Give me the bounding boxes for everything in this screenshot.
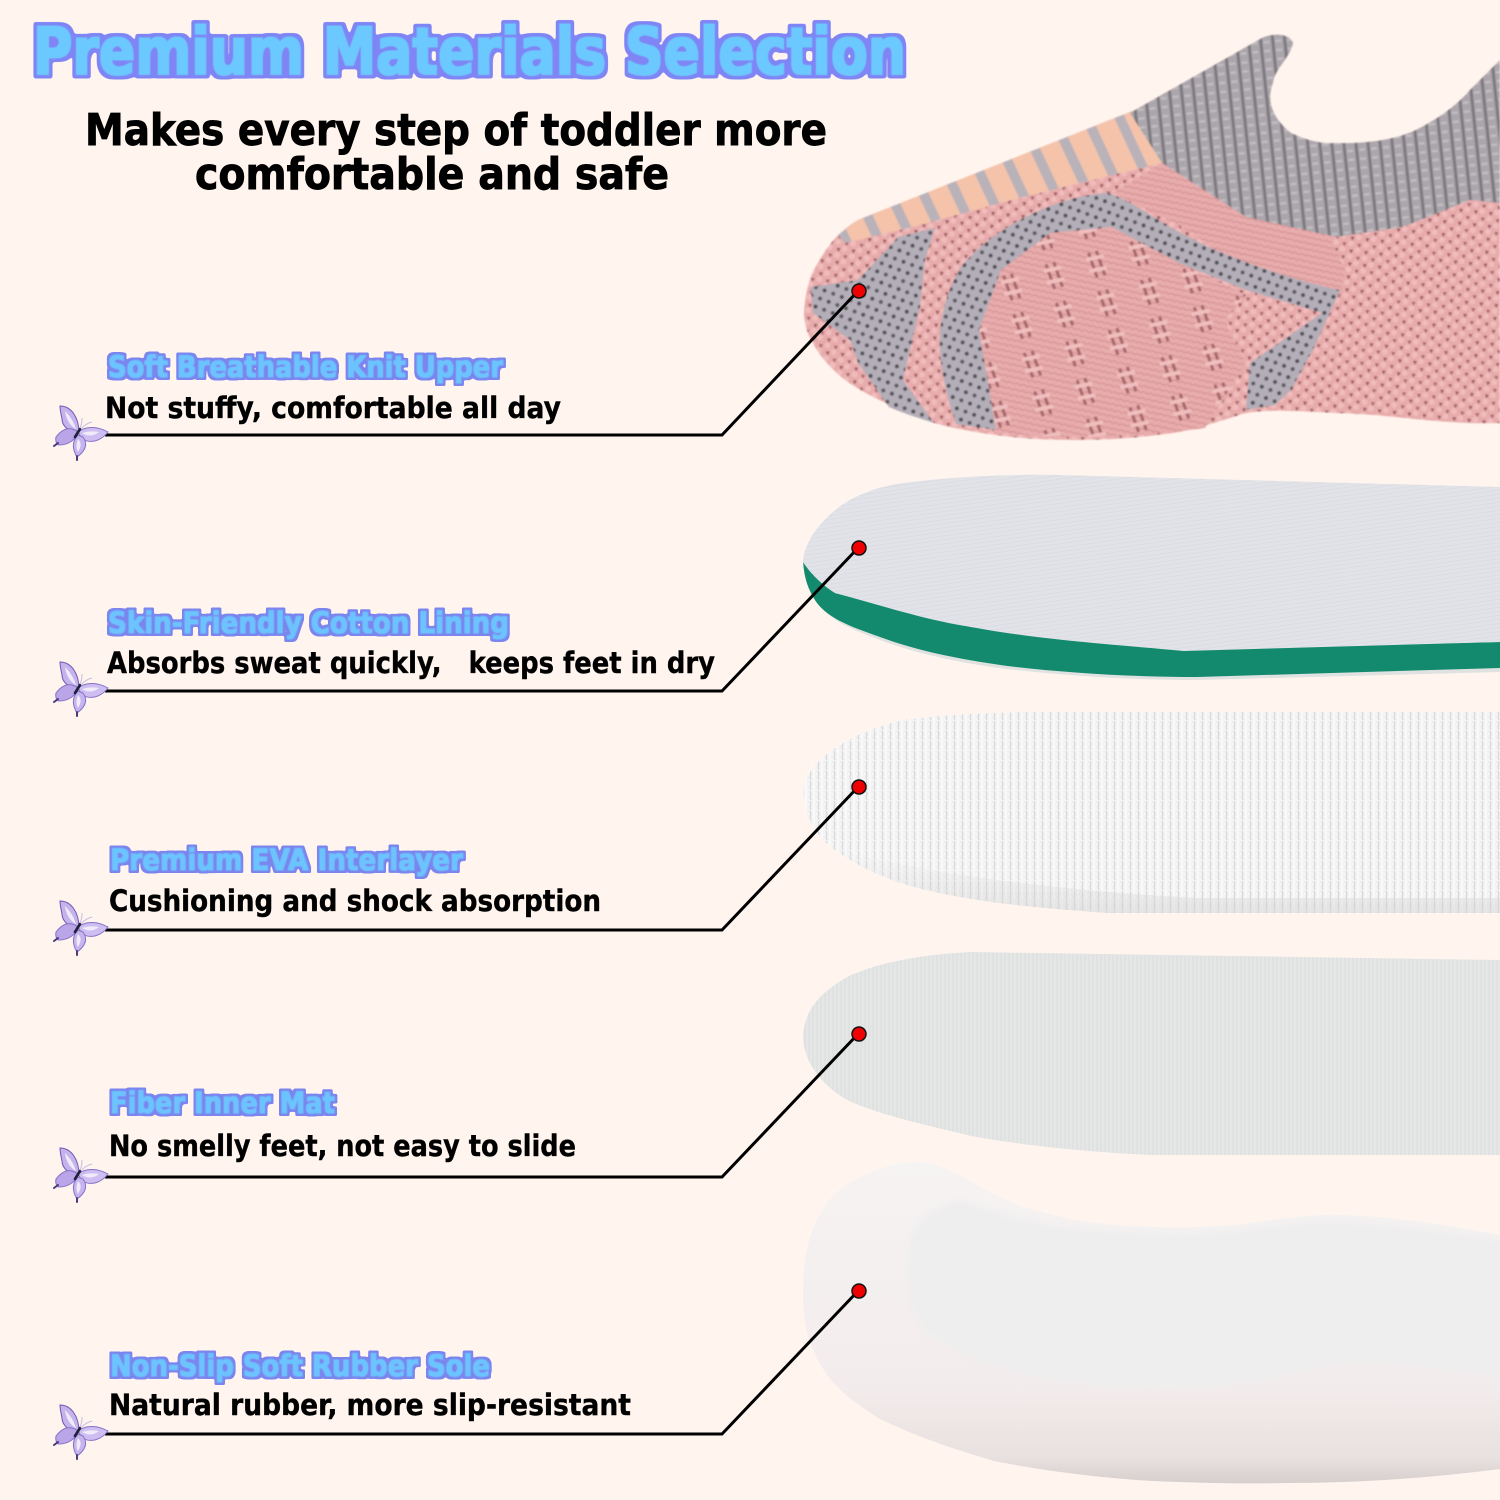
callout 1 [54, 284, 866, 460]
shoe knit upper [804, 35, 1500, 440]
leader line [105, 548, 858, 691]
eyelet texture [979, 227, 1246, 437]
description: Cushioning and shock absorption [109, 884, 601, 918]
leader line [105, 291, 858, 435]
butterfly [54, 901, 108, 955]
butterfly [54, 662, 108, 716]
subtitle: comfortable and safe [195, 149, 669, 200]
description: No smelly feet, not easy to slide [109, 1129, 576, 1163]
pale underside [817, 603, 1500, 680]
description: Not stuffy, comfortable all day [105, 391, 561, 425]
heading: Fiber Inner Mat [110, 1086, 335, 1120]
cotton top surface [803, 475, 1500, 651]
heading: Premium EVA Interlayer [110, 843, 464, 877]
lower edge shading [835, 850, 1500, 913]
description: Absorbs sweat quickly, keeps feet in dry [107, 646, 715, 680]
heading: Non-Slip Soft Rubber Sole [110, 1349, 490, 1383]
heading: Soft Breathable Knit Upper [108, 350, 504, 384]
callout 2 [54, 541, 866, 716]
fiber inner mat [803, 952, 1500, 1155]
subtitle: Makes every step of toddler more [85, 105, 827, 156]
callout 5 [54, 1284, 866, 1459]
central fine knit panel [979, 227, 1246, 437]
grey chevron band [940, 193, 1340, 430]
fine knit band under collar [1112, 163, 1345, 295]
grey ribbed collar [1130, 35, 1500, 237]
butterfly [54, 1405, 108, 1459]
description: Natural rubber, more slip-resistant [109, 1388, 631, 1422]
leader line [105, 787, 858, 930]
leader line [105, 1034, 858, 1177]
heading: Skin-Friendly Cotton Lining [108, 606, 509, 640]
insole: cotton lining with green foam edge [803, 475, 1500, 680]
leader line [105, 1291, 858, 1434]
red dot [852, 1027, 866, 1041]
sole rim [803, 1162, 1500, 1483]
red dot [852, 284, 866, 298]
red dot [852, 541, 866, 555]
butterfly [54, 406, 108, 460]
subtitle [85, 105, 827, 200]
shoe body [804, 35, 1500, 440]
red dot [852, 1284, 866, 1298]
title: Premium Materials Selection [33, 15, 906, 90]
peach striped edge [838, 110, 1162, 243]
grey toe band [811, 228, 935, 423]
callout 3 [54, 780, 866, 955]
red dot [852, 780, 866, 794]
mesh surface [803, 712, 1500, 913]
rubber sole [803, 1162, 1500, 1483]
butterfly [54, 1148, 108, 1202]
green foam base [803, 560, 1500, 677]
callout 4 [54, 1027, 866, 1202]
sole top surface [907, 1200, 1500, 1388]
EVA interlayer [803, 712, 1500, 913]
